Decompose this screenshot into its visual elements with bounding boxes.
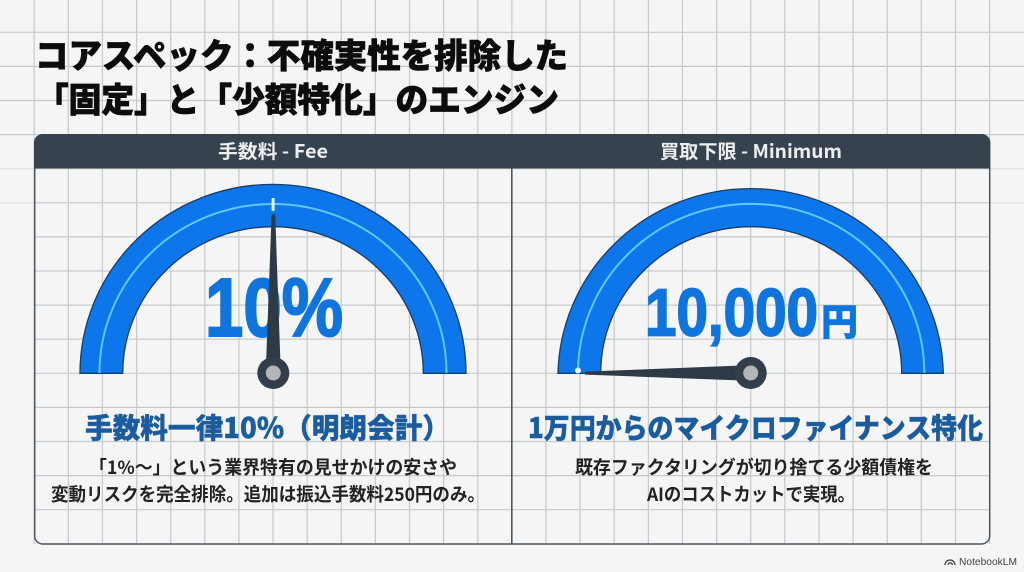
needle hub: [735, 357, 767, 389]
title: [35, 29, 568, 122]
big number: 10%: [205, 261, 343, 354]
needle: [585, 366, 742, 380]
hub cap: [266, 366, 281, 380]
arc highlight: [578, 204, 924, 373]
big number: 10,000: [645, 276, 818, 350]
yen unit: 円: [821, 292, 858, 346]
text: fee heading: 手数料一律10%（明朗会計）: [85, 407, 450, 447]
panel: comparison table: [34, 134, 990, 544]
icon: notebook logo: [945, 560, 955, 565]
arc highlight: [100, 204, 446, 373]
gauge arc: [558, 189, 943, 373]
panel frame: [35, 135, 990, 544]
gauge arc: [80, 184, 466, 373]
text: minimum heading: 1万円からのマイクロファイナンス特化: [528, 407, 983, 447]
title: コアスペック：不確実性を排除した: [35, 29, 568, 78]
header: minimum: 買取下限 - Minimum: [660, 137, 842, 164]
watermark: NotebookLM: NotebookLM: [959, 556, 1017, 568]
text: fee description: 変動リスクを完全排除。追加は振込手数料250円のみ。: [51, 481, 485, 507]
text: minimum description: 既存ファクタリングが切り捨てる少額債権を: [575, 454, 933, 480]
text: fee description: 「1%〜」という業界特有の見せかけの安さや: [89, 454, 457, 480]
text: minimum description: AIのコストカットで実現。: [646, 481, 855, 507]
text: minimum description: [575, 454, 933, 507]
needle: [266, 214, 280, 365]
header bar: [34, 134, 990, 168]
gauge: minimum 10,000 yen: [558, 189, 943, 389]
title: 「固定」と「少額特化」のエンジン: [36, 73, 559, 122]
start dot: [575, 368, 581, 374]
gauge: fee 10%: [80, 184, 466, 389]
text: fee description: [51, 454, 485, 507]
hub cap: [743, 366, 758, 380]
header: fee: 手数料 - Fee: [218, 137, 328, 164]
column divider: [511, 168, 513, 544]
needle hub: [257, 357, 289, 389]
tick mark: [272, 198, 275, 211]
